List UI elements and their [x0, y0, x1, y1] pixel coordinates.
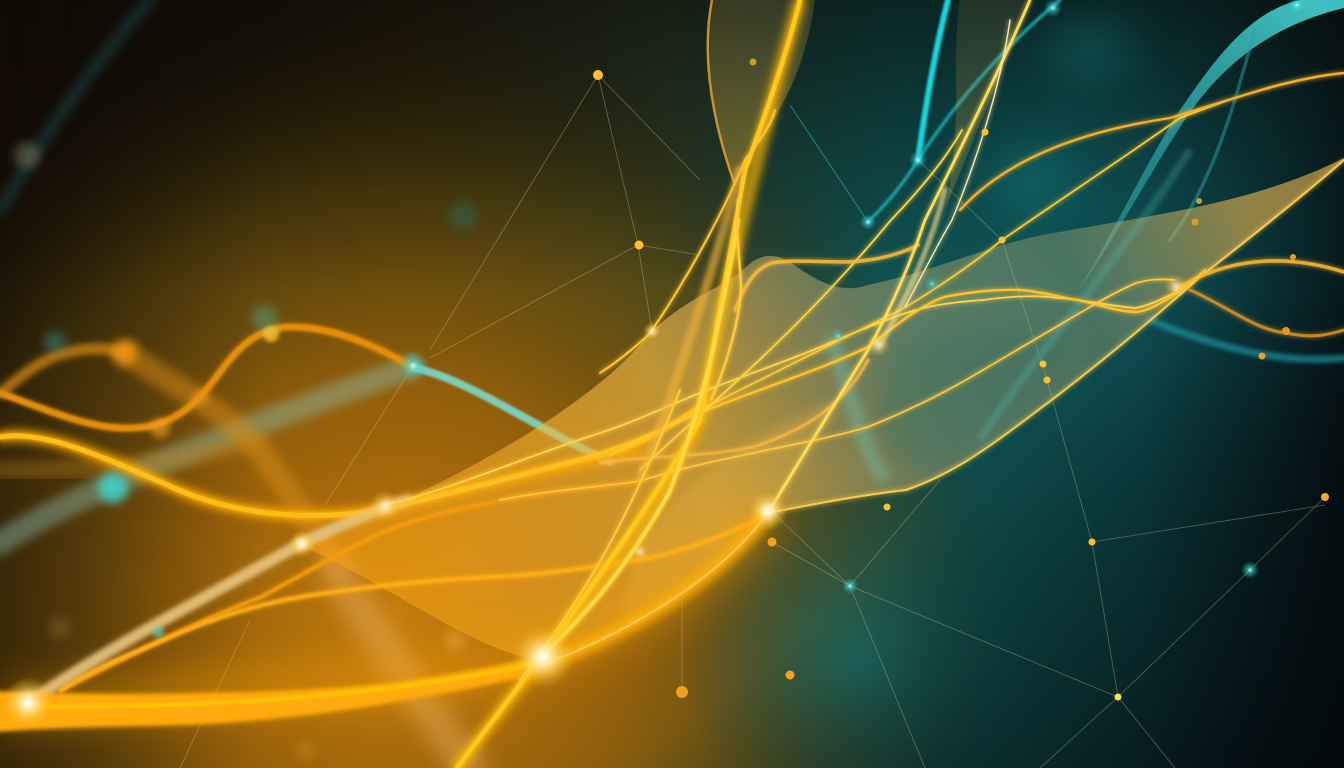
wide blurred amber bands, left	[0, 353, 470, 768]
bright light flares	[2, 274, 1188, 729]
mesh ribbon: upper loops	[708, 0, 1030, 210]
strand: long left wave	[0, 403, 705, 516]
strand: fine centre lines	[385, 293, 1174, 505]
blurred teal streaks, left	[0, 0, 610, 543]
mesh ribbon: main translucent band	[300, 150, 1344, 662]
strand glow layer	[0, 0, 800, 768]
strand: rising ribbons	[457, 0, 800, 768]
blurred bokeh dots	[14, 142, 477, 759]
network nodes: gold	[593, 58, 1329, 700]
strand: lower edge of the band	[530, 160, 1344, 670]
teal network lines	[790, 105, 868, 222]
strand: upper left loop	[0, 327, 412, 428]
network lines	[180, 75, 1325, 768]
background teal haze	[990, 20, 1135, 210]
strand: long line to the upper right	[610, 73, 1344, 455]
orange glow behind lower ribbons	[0, 510, 770, 710]
teal ribbons, upper right	[868, 0, 1344, 359]
strand: pale lower left band	[28, 500, 408, 703]
network nodes: teal and white	[398, 0, 1306, 594]
strand: bottom tapered band	[0, 658, 535, 732]
